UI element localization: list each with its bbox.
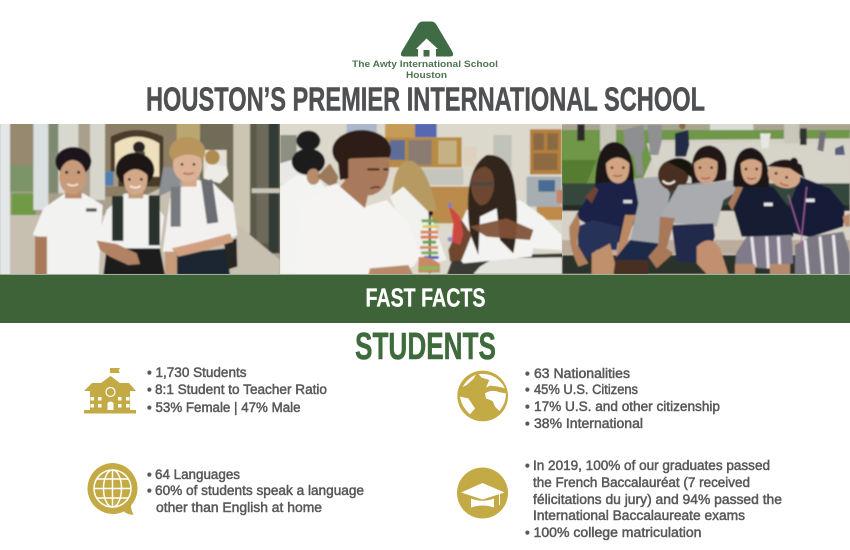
- boy 2: [97, 193, 164, 253]
- logo location: Houston: [406, 70, 447, 80]
- bullet list: nationalities: •: [525, 416, 530, 431]
- boy 1: [33, 193, 103, 275]
- bullet list: graduates: •: [525, 458, 530, 473]
- boy in lab coat: [320, 182, 418, 274]
- bullet list: languages: 64 Languages: [155, 467, 240, 482]
- bullet list: graduates: 100% college matriculation: [534, 525, 702, 540]
- bullet list: languages: 60% of students speak a language: [155, 483, 364, 498]
- girl 5: [790, 177, 845, 237]
- girl 3: [662, 180, 737, 227]
- bullet list: graduates: International Baccalaureate exams: [533, 508, 745, 523]
- bullet list: nationalities: 45% U.S. Citizens: [534, 382, 638, 397]
- block: graduates: [457, 458, 782, 540]
- banner heading: FAST FACTS: [366, 282, 486, 312]
- boy 3: [163, 178, 237, 252]
- bullet list: graduates: [525, 458, 782, 540]
- banner: fast facts: [0, 274, 850, 323]
- block: nationalities: [457, 366, 720, 431]
- icon: schoolhouse: [84, 368, 136, 414]
- background students: [296, 131, 320, 151]
- girl: [450, 200, 562, 263]
- heading: students: STUDENTS: [355, 326, 496, 368]
- photo: students in science lab: [277, 120, 570, 280]
- girl 1: [594, 141, 635, 186]
- bullet list: enrollment: 53% Female | 47% Male: [156, 400, 300, 415]
- photo: three boys in school corridor: [0, 120, 283, 280]
- bullet list: enrollment: 1,730 Students: [156, 365, 247, 380]
- bullet list: nationalities: •: [525, 366, 530, 381]
- icon: graduation cap: [457, 468, 508, 518]
- bullet list: nationalities: 38% International: [534, 416, 643, 431]
- bullet list: graduates: •: [525, 525, 530, 540]
- bullet list: languages: •: [147, 483, 152, 498]
- logo text: The Awty International School: [352, 59, 498, 69]
- bullet list: languages: other than English at home: [156, 500, 322, 515]
- bullet list: enrollment: [147, 365, 327, 415]
- icon: earth globe: [457, 371, 508, 421]
- bullet list: graduates: the French Baccalauréat (7 received: [533, 475, 750, 490]
- bullet list: nationalities: •: [525, 399, 530, 414]
- DNA model: [429, 213, 431, 273]
- bullet list: enrollment: •: [147, 365, 152, 380]
- block: enrollment: [84, 365, 327, 415]
- icon: Awty house-in-A logo: [401, 22, 453, 56]
- bullet list: enrollment: •: [147, 382, 152, 397]
- girl 4: [733, 148, 769, 188]
- bullet list: languages: [147, 467, 364, 515]
- bullet list: graduates: félicitations du jury) and 94% passed the: [533, 492, 782, 507]
- block: languages: [87, 463, 364, 515]
- bullet list: languages: •: [147, 467, 152, 482]
- bullet list: nationalities: 63 Nationalities: [534, 366, 630, 381]
- icon: globe speech bubble: [87, 463, 137, 515]
- bullet list: enrollment: •: [147, 400, 152, 415]
- bullet list: nationalities: 17% U.S. and other citizenship: [534, 399, 720, 414]
- girl 2: [630, 177, 670, 243]
- logo: [352, 22, 498, 80]
- bullet list: nationalities: [525, 366, 720, 431]
- bullet list: nationalities: •: [525, 382, 530, 397]
- bullet list: enrollment: 8:1 Student to Teacher Ratio: [155, 382, 327, 397]
- bullet list: graduates: In 2019, 100% of our graduates passed: [533, 458, 770, 473]
- photo: five girls on a bench: [560, 120, 850, 280]
